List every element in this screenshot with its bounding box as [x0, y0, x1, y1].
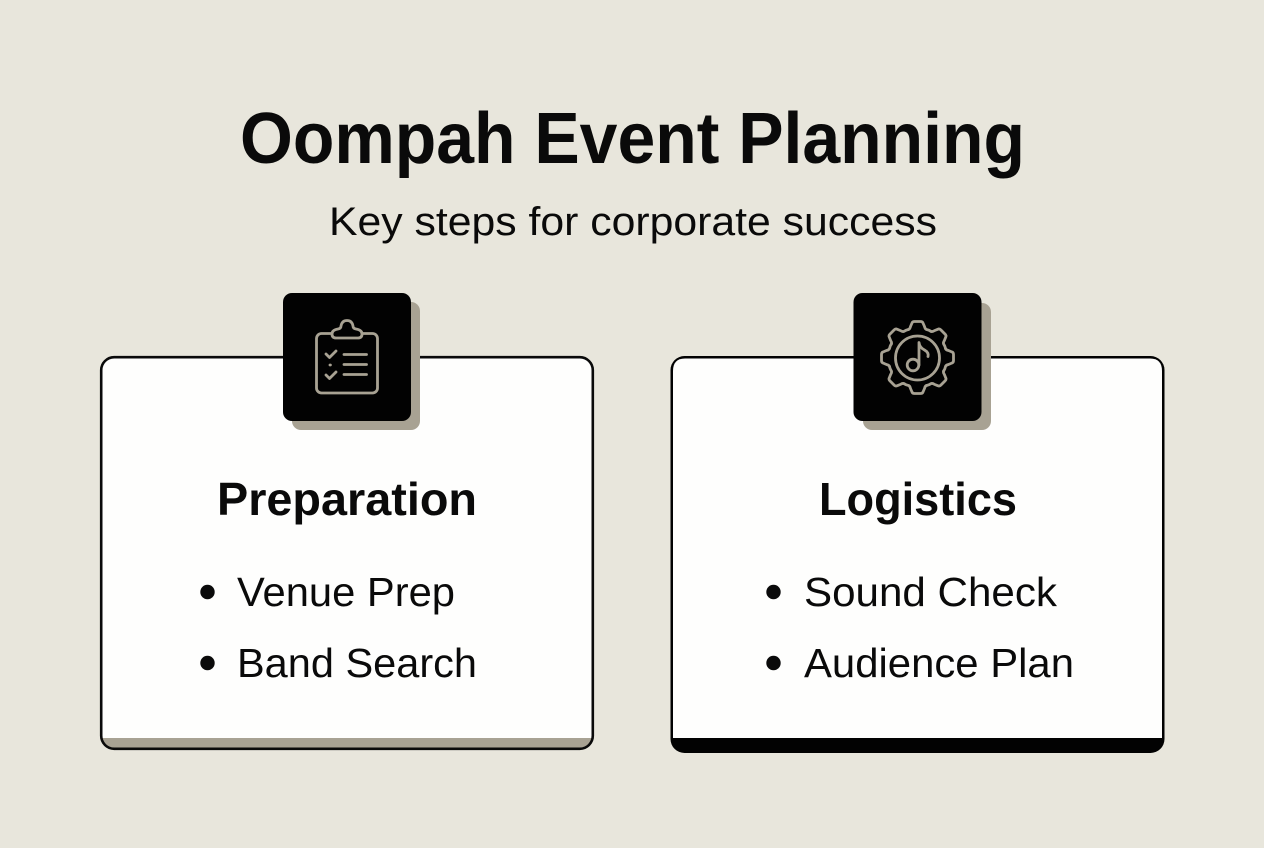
list: logistics items: Audience Plan	[804, 640, 1074, 686]
heading: preparation: Preparation	[217, 473, 477, 525]
icon: clipboard checklist	[283, 293, 420, 430]
card: preparation	[101, 357, 593, 749]
panel: logistics	[670, 293, 1164, 753]
list: preparation items	[200, 569, 477, 686]
subtitle: Key steps for corporate success	[329, 200, 937, 244]
icon: gear with music note	[854, 293, 991, 430]
list: preparation items: Venue Prep	[237, 569, 455, 615]
card: logistics	[670, 356, 1164, 753]
list: preparation items: Band Search	[237, 640, 477, 686]
list: logistics items: Sound Check	[804, 569, 1058, 615]
list: logistics items	[766, 569, 1074, 686]
heading: logistics: Logistics	[819, 473, 1017, 525]
title: Oompah Event Planning	[240, 99, 1025, 179]
panel: preparation	[101, 293, 593, 749]
